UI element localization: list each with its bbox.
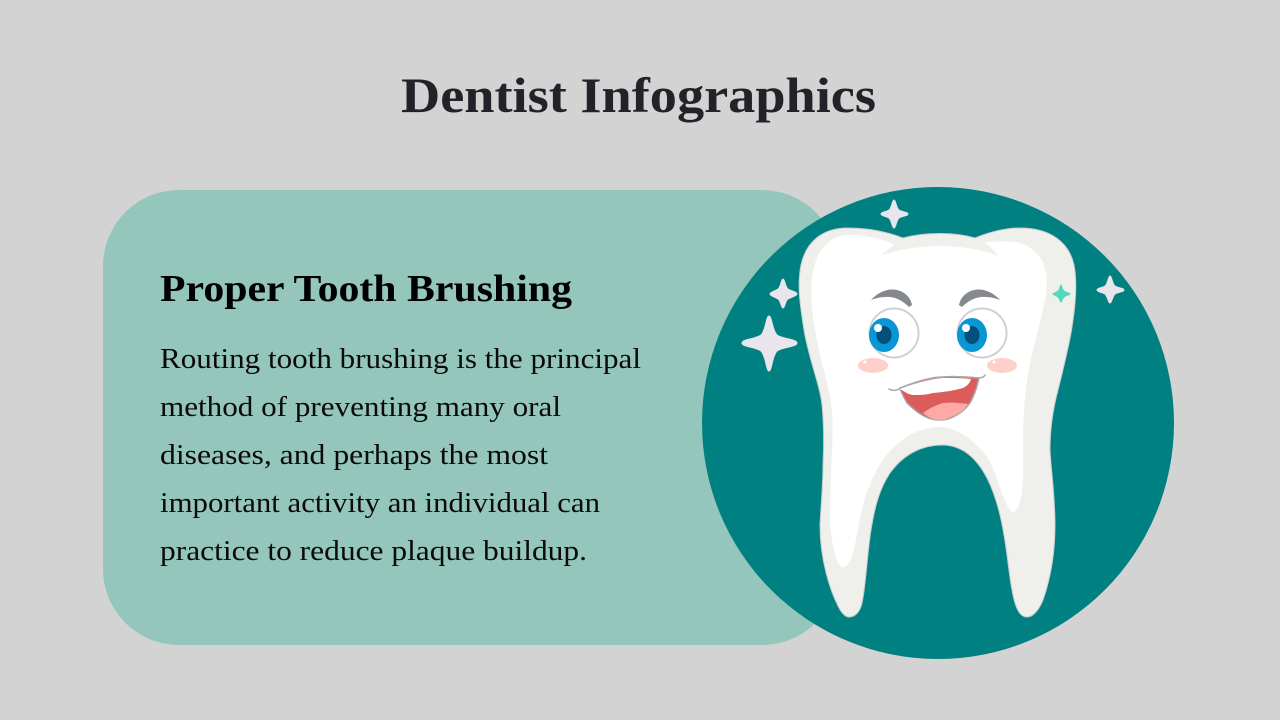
teal circle [702, 187, 1174, 659]
icon: sparkles [742, 200, 1124, 371]
tooth white highlight [811, 235, 1047, 567]
panel body text: Routing tooth brushing is the principal [160, 344, 641, 375]
panel: proper tooth brushing [103, 190, 838, 645]
panel body text: method of preventing many oral [160, 392, 561, 423]
panel body text: practice to reduce plaque buildup. [160, 536, 587, 567]
title: Dentist Infographics [401, 67, 876, 123]
panel body text [160, 344, 641, 567]
left eye [869, 308, 918, 358]
icon: tooth [799, 228, 1076, 617]
panel heading: Proper Tooth Brushing [160, 268, 572, 310]
right cheek [987, 358, 1017, 373]
left eyebrow [871, 289, 912, 307]
panel body text: important activity an individual can [160, 488, 600, 519]
left cheek [858, 358, 888, 373]
tooth body [799, 228, 1076, 617]
right eyebrow [959, 289, 1000, 307]
panel body text: diseases, and perhaps the most [160, 440, 548, 471]
mouth [889, 375, 985, 420]
right eye [957, 308, 1006, 358]
panel background [103, 190, 838, 645]
icon: teal sparkle [1053, 285, 1070, 302]
